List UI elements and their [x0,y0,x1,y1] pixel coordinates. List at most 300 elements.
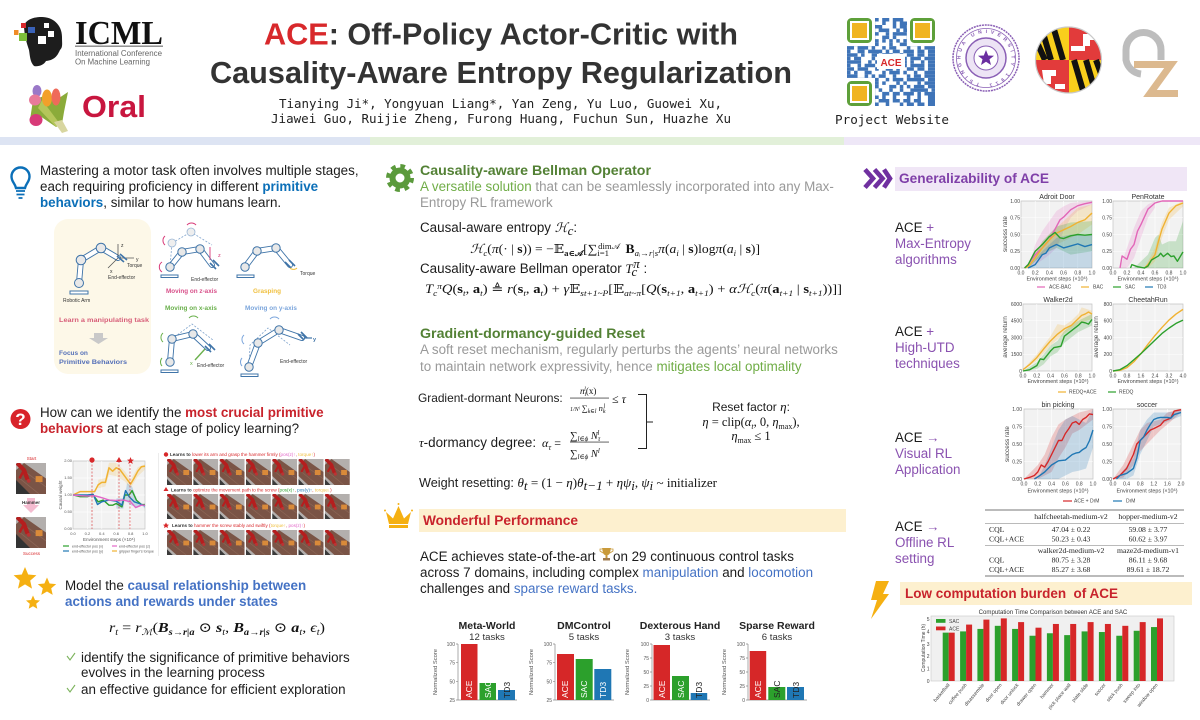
label: ACE + Max-Entropy: algorithms [895,252,957,267]
arm: moving on z-axis: End-effector [191,277,218,283]
chart: Walker2d: Walker2d [1043,297,1073,304]
chart: computation time comparison: plate slide [1071,682,1090,704]
chart: bin picking: bin picking [1041,402,1075,409]
panel: causality-aware Bellman operator [388,163,842,298]
formula: gradient-dormant neurons: 1/Nˡ ∑ [570,403,588,413]
formula: weight resetting: t−1 [584,478,603,493]
bracket [638,394,653,448]
chart: Walker2d: 0 [1019,369,1022,375]
chart: causal weight over training: gripper finger's torque [119,550,154,554]
label: ACE to Visual RL: ACE → [895,430,940,445]
chart: Walker2d: 1.0 [1089,374,1096,380]
chart: Adroit Door: 0.50 [1010,232,1020,238]
icon: light bulb [12,168,30,198]
formula: tau-dormancy degree: N [588,431,599,442]
chart: computation time comparison: Computation Time (h) [921,624,927,672]
chart: Dexterous Hand: Dexterous Hand [640,620,720,632]
formula: reset factor: , 0, [754,415,772,429]
chart: CheetahRun: 400 [1104,336,1112,342]
label: ACE to Visual RL [895,430,961,477]
chart: Sparse Reward: 0 [742,698,745,704]
panel: manipulating task [54,219,151,374]
formula: Bellman backup: r(s [507,282,523,296]
title: ACE: Off-Policy Actor-Critic with [264,18,738,52]
formula: gradient-dormant neurons: l [584,387,586,393]
text: performance summary: across 7 domains, including complex manipulation and locomotion [420,565,813,580]
formula: Bellman backup: a [688,282,696,296]
chart: bin picking: 0.4 [1048,482,1055,488]
chart: CheetahRun: 0 [1109,369,1112,375]
formula: entropy: i [676,249,679,258]
chart: bin picking [1004,402,1097,494]
chart: Sparse Reward: 75 [739,656,745,662]
icon: lightning bolt [871,581,889,619]
chart: Dexterous Hand [625,620,720,704]
formula: Bellman backup: t+1 [695,289,709,298]
chart: Adroit Door: 1.00 [1010,199,1020,205]
chart: computation time comparison: 5 [927,617,930,623]
authors: Tianying Ji*, Yongyuan Liang*, Yan Zeng, Yu Luo, Guowei Xu, [279,96,722,111]
chart: Adroit Door: 0.00 [1010,266,1020,272]
formula: Bellman backup: c [751,289,756,298]
panel: gradient-dormancy-guided reset [418,326,838,493]
chart: soccer [1102,402,1185,494]
chart: CheetahRun: average return [1093,316,1100,358]
text: question [40,405,324,436]
panel: left column causal model [14,567,350,697]
chart: Sparse Reward: TD3 [791,682,801,698]
chart: DMControl: TD3 [598,682,608,698]
formula: Bellman backup: ) + [709,282,729,296]
text: causal-aware entropy: Causal-aware entropy ℋ [420,220,568,235]
figure: robotic arm primitives [54,219,317,376]
check list: evolves in the learning process [81,665,265,680]
formula: gradient-dormant neurons: i [584,392,586,398]
label: ACE to Offline RL [895,519,954,566]
chart: Sparse Reward: SAC [772,681,782,698]
heading banner: generalizability: Generalizability of ACE [899,171,1049,186]
formula: tau-dormancy degree: τ-dormancy degree: [419,435,536,450]
legend: high-UTD charts: REDQ+ACE [1069,390,1097,396]
formula: Bellman backup: st+1~P [580,289,608,298]
arm: moving on x-axis: x [190,361,193,367]
chart: DMControl: Normalized Score [529,649,535,695]
chart: DMControl: ACE [560,680,570,698]
chart: causal weight over training: end-effector pos (y) [72,550,103,554]
arm: moving on y-axis: Moving on y-axis [245,306,298,312]
chart: Sparse Reward: 100 [737,642,745,648]
formula: reward function: B [232,621,244,636]
formula: entropy: ( [487,242,492,256]
chart: computation time comparison: 2 [927,654,930,660]
icon: chevrons [865,170,890,188]
table: offline RL results: CQL [989,556,1005,564]
chart: computation time comparison: disassemble [964,682,986,708]
chart: CheetahRun: 4.0 [1180,374,1187,380]
table: offline RL results: 50.23 ± 0.43 [1052,534,1091,544]
chart: soccer: 1.6 [1164,482,1171,488]
text: causal model intro: actions and rewards under states [65,594,278,609]
chart: Meta-World: Meta-World [459,620,515,632]
formula: weight resetting: i [631,478,635,493]
panel: manipulating task: x [110,269,113,275]
chart: soccer: 1.00 [1102,407,1112,413]
chart: Sparse Reward: 25 [739,684,745,690]
chart: Meta-World: 12 tasks [469,632,505,643]
authors: Jiawei Guo, Ruijie Zheng, Furong Huang, Fuchun Sun, Huazhe Xu [271,111,731,126]
header: ICML logo: On Machine Learning [75,58,150,66]
chart: soccer: 1.2 [1150,482,1157,488]
text: reset description: to maintain network expressivity, hence mitigates local optimality [420,359,802,374]
formula: entropy: aᵢ→r|s [635,249,658,258]
chart: soccer: soccer [1137,402,1158,409]
panel: left column question [10,405,350,556]
text: Bellman description: A versatile solution that can be seamlessly incorporated into any Max- [420,179,834,194]
chart: causal weight over training: 0.0 [70,531,77,536]
chart: causal weight over training: end-effector pos (x) [72,544,103,548]
formula: tau-dormancy degree: α [542,436,548,450]
formula: Bellman backup: αℋ [729,282,754,296]
chart: computation time comparison: 4 [927,629,930,635]
formula: gradient-dormant neurons: n [596,403,603,413]
chart: PenRotate: 1.00 [1102,199,1112,205]
legend: max-entropy charts: BAC [1093,284,1104,290]
table: offline RL results: hopper-medium-v2 [1118,512,1178,521]
chart: Meta-World: 50 [449,679,455,685]
chart: Sparse Reward: 6 tasks [762,632,792,643]
formula: reward function: = [118,621,135,636]
table: offline RL results: 47.04 ± 0.22 [1052,525,1091,534]
panel: left column motivation [12,163,359,376]
chart: Dexterous Hand: 100 [641,642,649,648]
chart: Walker2d: 0.2 [1033,374,1040,380]
table: offline RL results: CQL [989,525,1005,534]
table: offline RL results: 85.27 ± 3.68 [1052,565,1091,574]
chart: PenRotate: 0.25 [1102,249,1112,255]
chart: Meta-World: Normalized Score [433,649,439,695]
chart: Meta-World: TD3 [502,682,512,698]
arm: moving on z-axis [159,223,221,295]
chart: causal weight over training: Environment steps (×10⁶) [83,537,135,542]
chart: causal weight over training: 0.8 [128,531,134,536]
chart: Dexterous Hand: 50 [643,670,649,676]
label: ACE + Max-Entropy: ACE + [895,220,934,235]
chart: causal weight over training: end-effector pos (z) [119,544,150,548]
chart: PenRotate: 0.8 [1166,270,1173,276]
chart: causal weight over training: 0.4 [99,531,105,536]
chart: computation time comparison: Computation Time Comparison between ACE and SAC [979,609,1128,616]
label: ACE + High-UTD: ACE + [895,324,934,339]
chart: Meta-World: SAC [483,681,493,698]
text: motivation: behaviors, similar to how humans learn. [40,195,281,210]
formula: entropy: | [736,242,746,256]
label: ACE + High-UTD: techniques [895,356,960,371]
formula: Bellman backup: , [466,282,473,296]
icon: question mark [10,409,30,429]
legend: visual RL charts: DrM [1126,498,1135,504]
chart: CheetahRun: 1.6 [1138,374,1145,380]
header: ICML logo [14,15,163,66]
chart: PenRotate: 0.75 [1102,216,1112,222]
text: causal model intro [65,578,306,609]
table: offline RL results [985,510,1184,576]
authors [271,96,731,126]
formula: weight resetting: i [650,478,654,493]
chart: Dexterous Hand: ACE [657,680,667,698]
chart: CheetahRun: Environment steps (×10⁵) [1117,379,1179,385]
formula: Bellman backup: , [526,282,533,296]
chart: causal weight over training: 0.2 [85,531,91,536]
chart: Adroit Door: success rate [1002,216,1009,252]
formula: gradient-dormant neurons: k∈l [588,409,597,415]
legend: visual RL charts: ACE + DrM [1074,498,1099,504]
chart: computation time comparison: sweep into [1122,682,1142,705]
chart: computation time comparison: pick place wall [1047,682,1073,711]
logo: Tsinghua University seal: TSINGHUA UNIVERSITY 1911 [957,30,1015,87]
chart: DMControl: SAC [579,681,589,698]
formula: entropy: dim𝒜 [598,242,621,251]
panel: low computation burden [871,581,1192,711]
panel: wonderful performance [384,503,846,704]
title [210,18,792,90]
chart: Meta-World: 75 [449,661,455,667]
chart: bin picking: 0.2 [1034,482,1041,488]
formula: entropy: ℋ [470,242,486,256]
logo: OZ mark [1126,32,1178,94]
panel: manipulating task: End-effector [108,275,135,281]
chart: Adroit Door [1002,194,1096,282]
panel: manipulating task: Robotic Arm [63,298,90,304]
formula: weight resetting: t [524,478,528,493]
heading banner: wonderful performance [419,509,846,532]
chart: Walker2d: Environment steps (×10⁶) [1027,379,1089,385]
formula: Bellman backup: t+1 [809,289,823,298]
formula: tau-dormancy degree: τ [598,435,601,443]
text: reset description: A soft reset mechanism, regularly perturbs the agents’ neural networks [420,342,838,357]
chart: PenRotate: 1.0 [1180,270,1187,276]
text: causal-aware entropy: c [568,223,574,238]
formula: reward function: , [302,621,310,636]
label: ACE + High-UTD: High-UTD [895,340,955,355]
row: stage 3 frames [163,522,350,555]
chart: causal weight over training: 2.00 [64,458,73,463]
text: reset description [420,342,838,374]
chart: bin picking: 0.8 [1076,482,1083,488]
formula: Bellman backup: ) + [543,282,563,296]
formula: reward function: ϵ [310,621,316,636]
chart: bin picking: 1.00 [1012,407,1022,413]
text: causal model intro: Model the causal relationship between [65,578,306,593]
formula: weight resetting: ~ initializer [653,475,718,490]
formula: Bellman backup: (s [452,282,462,296]
heading banner: generalizability [895,167,1187,191]
chart: Walker2d: 1500 [1011,352,1022,358]
check list: an effective guidance for efficient exploration [81,682,346,697]
formula: Bellman backup: a [473,282,481,296]
formula: reward function: , [225,621,233,636]
table: offline RL results: walker2d-medium-v2 [1038,546,1104,555]
heading banner: low computation burden: Low computation burden of ACE [905,586,1118,601]
formula: reward function: a→r|s [244,627,270,637]
label: ACE to Offline RL: ACE → [895,519,940,534]
formula: reset factor: Reset factor η: [712,399,790,414]
chart: CheetahRun: 2.4 [1152,374,1159,380]
arm: moving on x-axis: End-effector [197,363,224,369]
formula: entropy: [∑ [583,242,597,256]
chart: Dexterous Hand: Normalized Score [625,649,631,695]
chart: soccer: 0.50 [1102,442,1112,448]
chart: Adroit Door: 0.8 [1074,270,1081,276]
chart: Walker2d: 0.8 [1075,374,1082,380]
chart: causal weight over training: 1.50 [64,475,73,480]
chart: soccer: Environment steps (×10⁶) [1116,488,1178,494]
chart: bin picking: success rate [1004,426,1011,462]
formula: entropy: a∈𝒜 [564,249,585,258]
chart: soccer: 0.25 [1102,460,1112,466]
chart: causal weight over training: 1.0 [142,531,149,536]
label: ACE to Offline RL: setting [895,551,934,566]
panel: manipulating task: Focus on [59,350,88,357]
chart: PenRotate: 0.00 [1102,266,1112,272]
chart: Dexterous Hand: 25 [643,684,649,690]
formula: weight resetting: = (1 − [528,475,566,490]
icon: gear [388,166,412,190]
formula: reward function: s→r|a [168,627,195,637]
formula: reset factor [702,399,800,445]
text: Bellman operator label: : [640,261,647,276]
formula: Bellman backup: [ [641,282,646,296]
chart: Adroit Door: 0.6 [1060,270,1067,276]
formula: entropy: s)] [746,242,759,256]
legend: high-UTD charts [1058,390,1134,396]
text: performance summary: challenges and sparse reward tasks. [420,581,637,596]
chart: Dexterous Hand: 0 [646,698,649,704]
formula: reward function: B [157,621,169,636]
chart: PenRotate: PenRotate [1131,194,1165,201]
formula: reward function: ℳ [142,627,154,637]
chart: Sparse Reward [722,620,815,704]
chart: Walker2d: 0.0 [1020,374,1027,380]
chart: computation time comparison: hammer [1039,682,1056,700]
chart: DMControl: 100 [544,642,552,648]
formula: reward function: r [135,621,141,636]
formula: gradient-dormant neurons: k [603,409,606,415]
table: offline RL results: 89.61 ± 18.72 [1127,565,1169,574]
formula: gradient-dormant neurons: l [604,404,606,410]
formula: reward function: ) [320,621,325,636]
chart: PenRotate: 0.6 [1152,270,1159,276]
legend: max-entropy charts: ACE-BAC [1049,284,1072,290]
figure: hammer start to success [16,456,46,556]
chart: PenRotate: 0.2 [1124,270,1131,276]
chart: computation time comparison [921,609,1174,711]
chart: PenRotate [1102,194,1187,282]
chart: Meta-World: 100 [447,642,455,648]
chart: computation time comparison: 3 [927,642,930,648]
chart: CheetahRun: 0.0 [1110,374,1117,380]
text: motivation: each requiring proficiency in different primitive [40,179,318,194]
formula: entropy: c [483,249,488,258]
legend: high-UTD charts: REDQ [1119,390,1134,396]
chart: Adroit Door: 0.4 [1046,270,1053,276]
formula: entropy: i=1 [597,249,609,258]
table: offline RL results: CQL+ACE [989,534,1024,544]
figure: hammer start to success: Success [23,551,41,556]
table: offline RL results: maze2d-medium-v1 [1117,546,1179,555]
chart: CheetahRun: 3.2 [1166,374,1173,380]
formula: tau-dormancy degree: N [588,449,599,460]
chart: computation time comparison: stick push [1106,682,1125,703]
formula: Bellman backup: | [793,282,803,296]
formula: Bellman backup: , [681,282,688,296]
text: performance summary: on 29 continuous control tasks [613,549,794,564]
ICML subtitle: International Conference [75,49,162,58]
chart: Adroit Door: 0.2 [1032,270,1039,276]
formula: weight resetting: Weight resetting: θ [419,475,524,490]
chart: Walker2d: 3000 [1011,336,1022,342]
formula: gradient-dormant neurons [418,386,627,415]
icon: question mark: ? [15,410,26,429]
icon: stars [14,567,56,609]
chart: CheetahRun: 200 [1104,352,1112,358]
formula: reward function: t [115,627,119,637]
formula: Bellman backup: Q(s [646,282,666,296]
table: offline RL results: halfcheetah-medium-v2 [1034,512,1108,521]
title: Causality-Aware Entropy Regularization [210,56,792,90]
chart: causal weight over training [58,457,154,554]
formula: reward function: ⊙ [270,621,291,636]
heading banner: wonderful performance: Wonderful Performance [423,513,578,528]
row: stage 1 frames [164,452,350,485]
text: causal-aware entropy: : [573,220,577,235]
formula: gradient-dormant neurons: Gradient-dormant Neurons: [418,391,563,405]
panel: manipulating task: y [136,257,139,263]
chart: bin picking: 0.75 [1012,424,1022,430]
chart: Sparse Reward: Sparse Reward [739,620,815,632]
panel: manipulating task: z [121,243,124,249]
label: ACE to Offline RL: Offline RL [895,535,954,550]
chart: PenRotate: 0.4 [1138,270,1145,276]
formula: Bellman backup: π [437,282,443,291]
Oral label: Oral [82,89,146,124]
chart: DMControl: 5 tasks [569,632,599,643]
chart: computation time comparison: soccer [1093,682,1108,698]
formula: reward function: t [299,627,303,637]
arm: moving on y-axis: y [313,337,317,343]
formula: Bellman backup: γ𝔼 [563,282,579,296]
figure: hammer start to success: Start [27,456,37,461]
formula: reward function: a [291,621,299,636]
formula: Bellman backup: s [803,282,809,296]
chart: computation time comparison: SAC [949,619,960,625]
formula: Bellman backup: t+1 [667,289,681,298]
heading banner: low computation burden [900,582,1192,605]
chart: Sparse Reward: Normalized Score [722,649,728,695]
formula: reward function: t [317,627,320,637]
text: Bellman operator label: c [631,264,637,279]
label: ACE + High-UTD [895,324,960,371]
chart: bin picking: 1.0 [1090,482,1097,488]
formula: Bellman backup: [𝔼 [608,282,624,296]
arm: moving on y-axis [240,306,317,376]
chart: computation time comparison: 0 [927,679,930,685]
Project Website label: Project Website [835,112,949,127]
formula: tau-dormancy degree: = [551,436,561,450]
formula: weight resetting: , [635,475,641,490]
chart: soccer: 2.0 [1178,482,1185,488]
panel: manipulating task: Torque [127,263,143,269]
formula: weight resetting: ψ [641,475,650,490]
